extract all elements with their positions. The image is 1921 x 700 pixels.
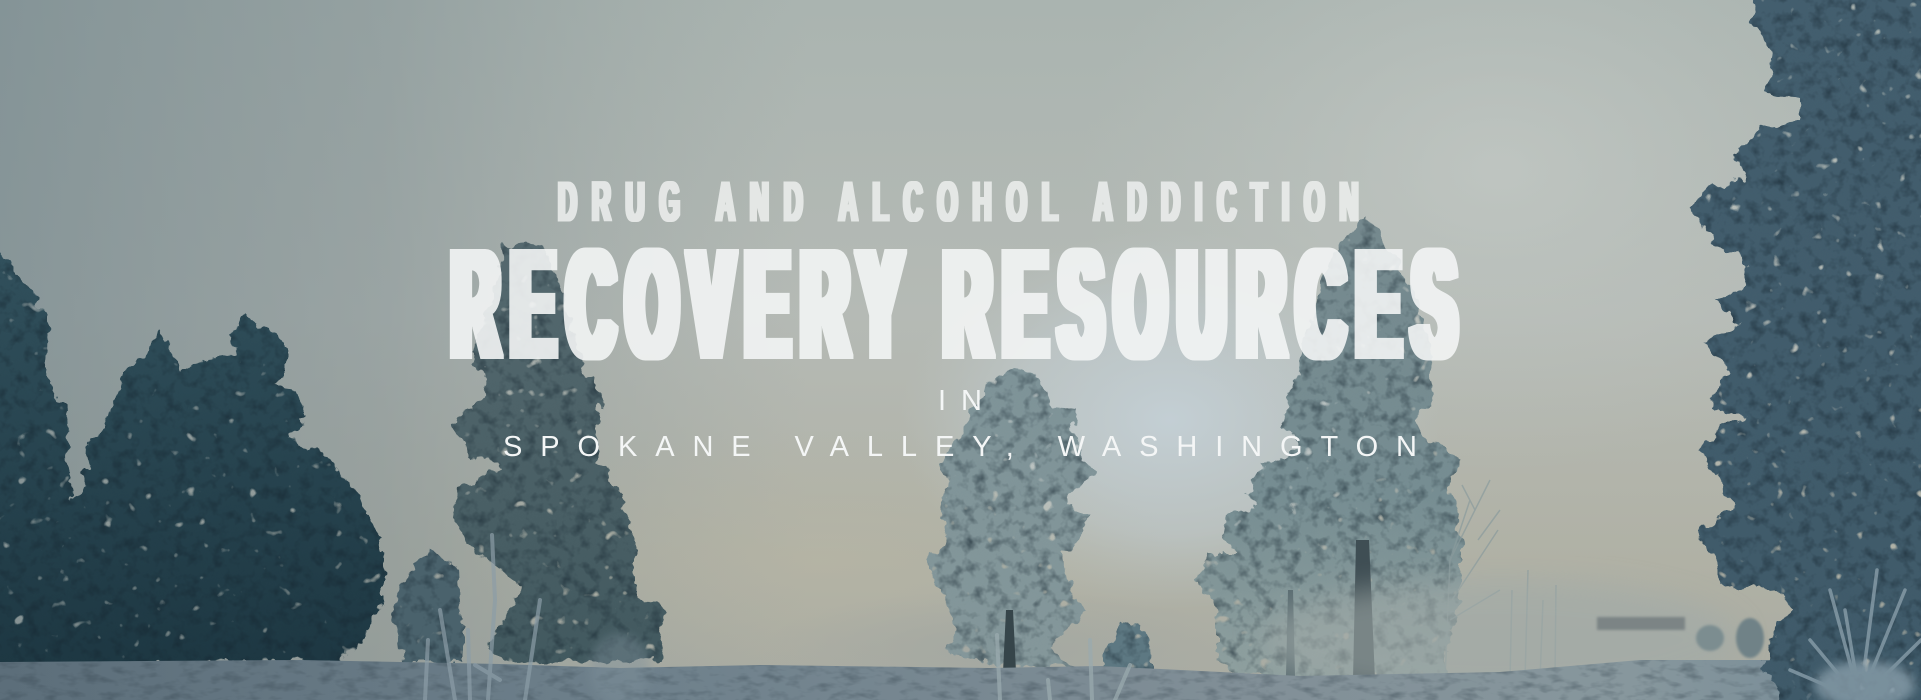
trunk: right cluster secondary (1286, 590, 1295, 676)
bare tree: frosted branches right of cluster (1445, 480, 1556, 680)
subtitle: spokane valley, washington: SPOKANE VALLEY, WASHINGTON (503, 431, 1417, 463)
kicker: drug and alcohol addiction: DRUG AND ALCOHOL ADDICTION (558, 171, 1358, 234)
ground: frosted field (0, 660, 1921, 700)
tree: small pine near left group (393, 548, 464, 660)
tree: fogged cluster on the right (1197, 217, 1465, 680)
tree: centre-left tall pine (453, 240, 665, 662)
tree: small pine beside centre tree (1096, 617, 1155, 690)
distant house and bushes (1597, 617, 1764, 658)
trunk: centre pine (1003, 610, 1016, 672)
trunk: right cluster main (1353, 540, 1375, 680)
title block (452, 171, 1456, 463)
tree: fogged pine in the centre (928, 368, 1094, 667)
frosted shrub: bottom right (1790, 570, 1921, 700)
headline: recovery resources: RECOVERY RESOURCES (452, 219, 1456, 391)
frosted plants: bottom left (425, 535, 650, 700)
tree group: dark pines on the left (0, 253, 384, 668)
frosted plants: bottom centre (997, 635, 1130, 700)
tree: large pine at the right edge (1690, 0, 1921, 700)
mist bank at the base of the right cluster (1260, 580, 1740, 700)
subtitle: in: IN (938, 385, 982, 417)
